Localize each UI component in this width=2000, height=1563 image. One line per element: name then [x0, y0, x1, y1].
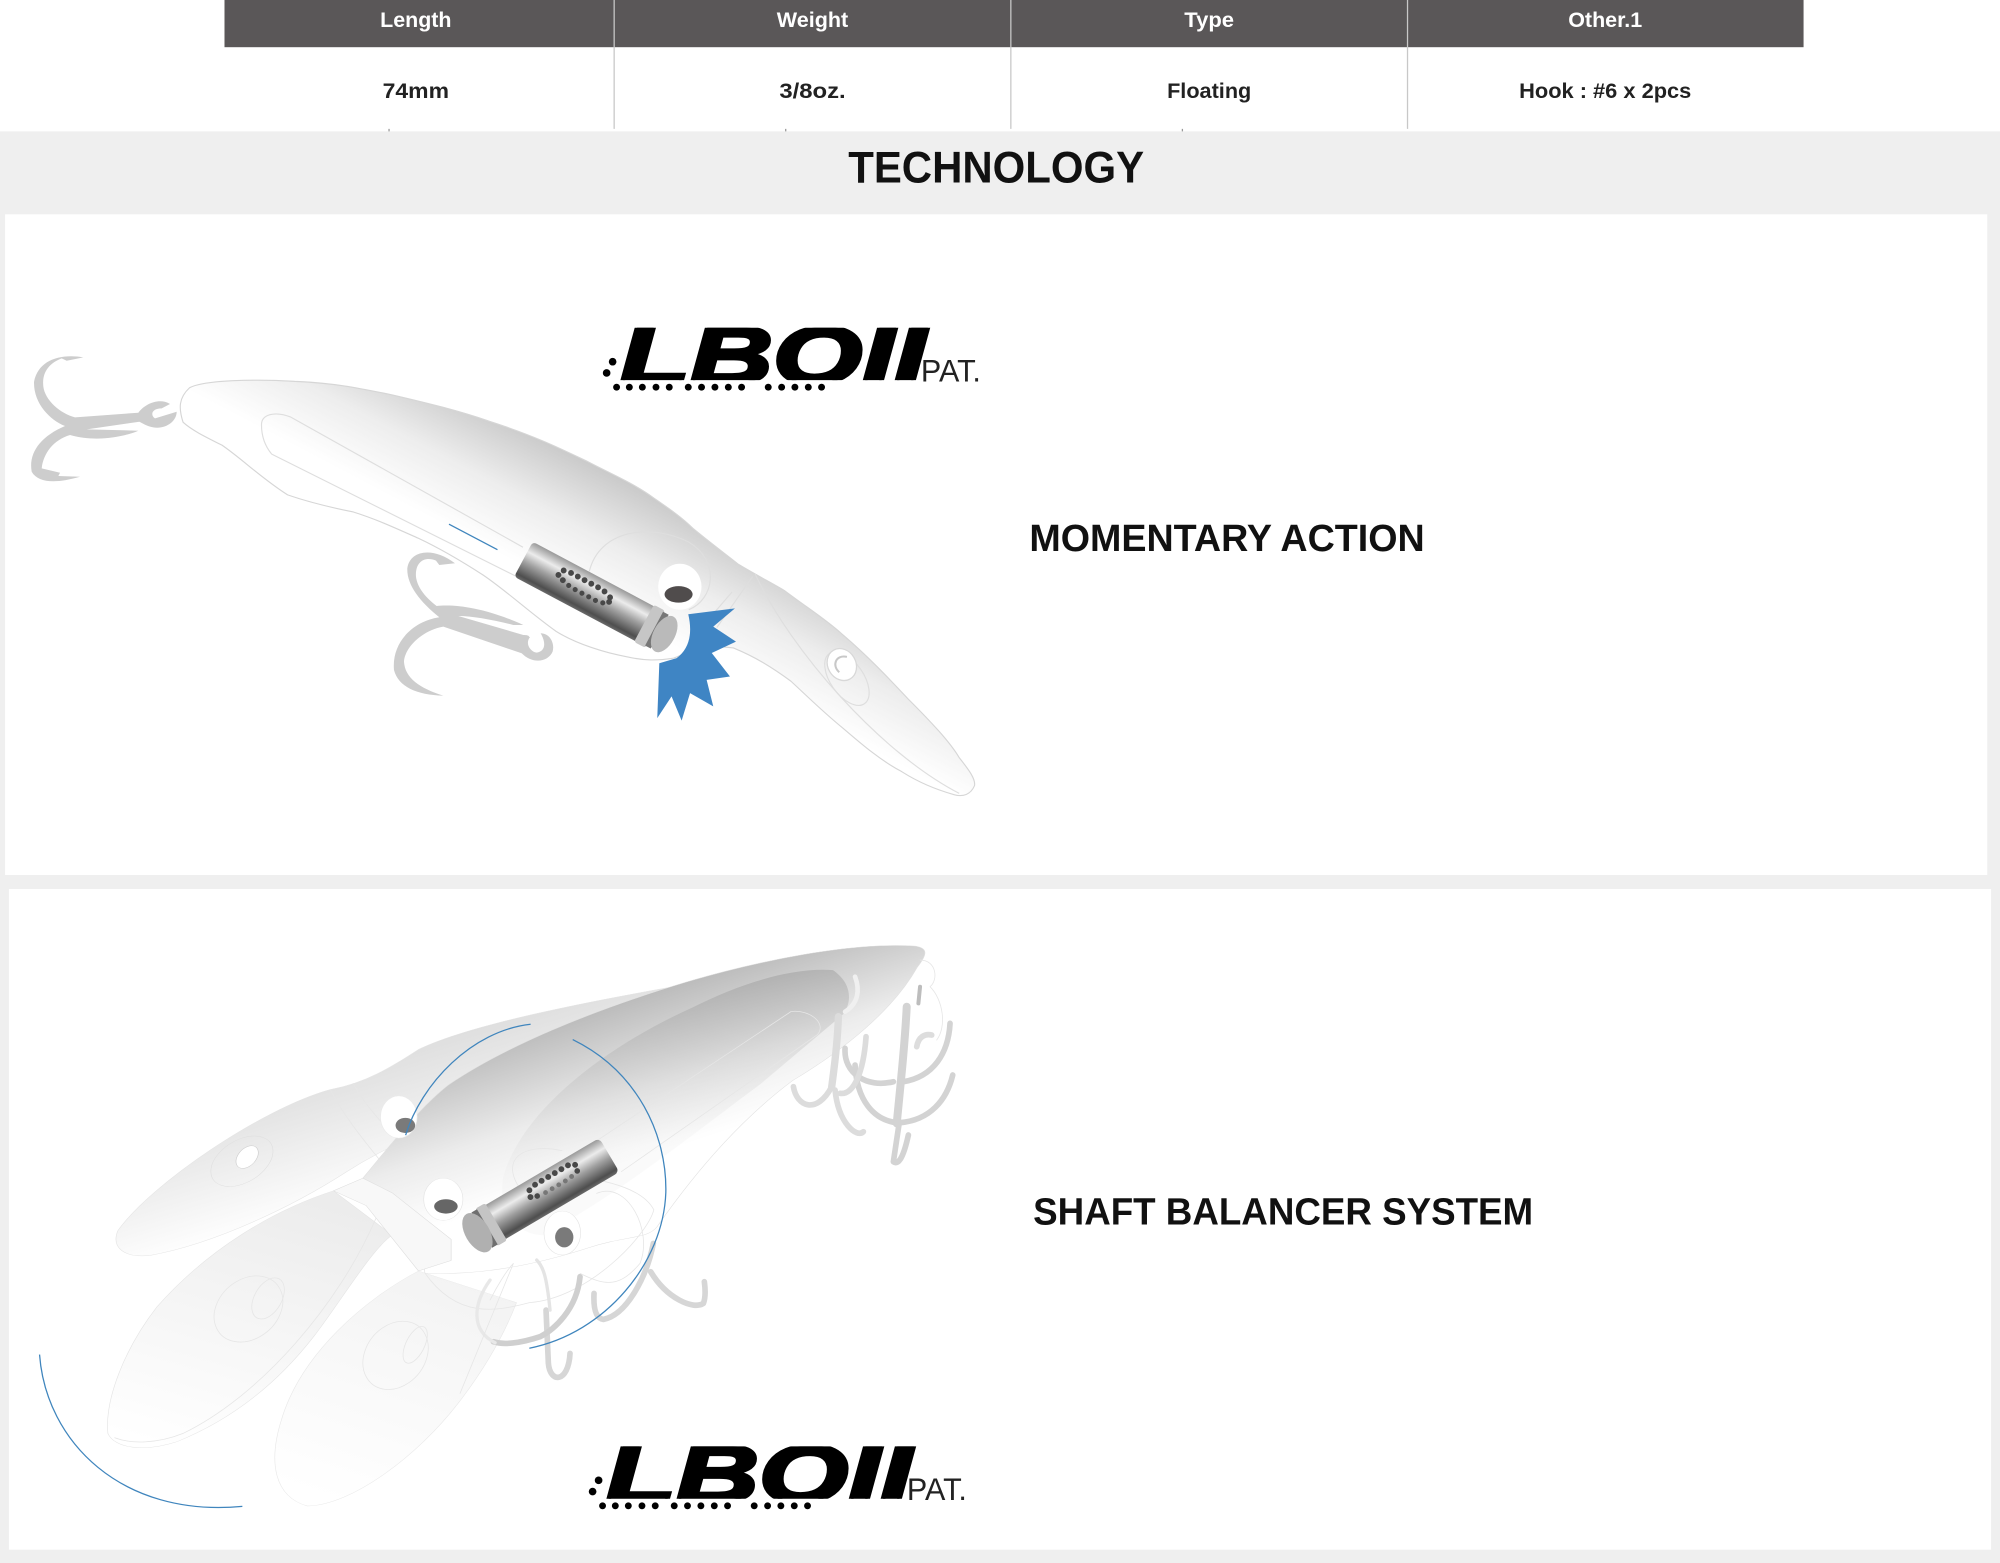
bottom ghost hooks: [460, 1191, 705, 1393]
spec table: Weight: [777, 7, 848, 32]
ghost lip A collar: [330, 1083, 405, 1168]
heading: TECHNOLOGY: [848, 143, 1144, 192]
spec table: Type: [1184, 7, 1234, 32]
spec table: Hook : #6 x 2pcs: [1519, 78, 1691, 103]
icon: tail treble hook: [31, 356, 177, 481]
logo dots: [603, 358, 825, 391]
lure swing illustration: [108, 946, 925, 1506]
spec table: 74mm: [383, 78, 449, 103]
panel: momentary action: [5, 214, 1987, 875]
logo: LB0II pat: [588, 1446, 964, 1510]
arrow: lower swing arc: [40, 1355, 242, 1508]
arrow: middle swing arc: [529, 1040, 666, 1348]
ghost lure A: [116, 980, 713, 1256]
inner swing lure: [502, 970, 849, 1235]
lip eye: [816, 643, 878, 713]
panel: shaft balancer system: [9, 889, 1991, 1550]
spec table: [0, 0, 2000, 131]
logo wordmark: LBOII: [620, 310, 929, 401]
spec table: 3/8oz.: [779, 78, 846, 103]
central head collar: [333, 1178, 451, 1271]
logo wordmark: LBOII: [606, 1429, 915, 1520]
shaft channel: [261, 414, 523, 577]
logo: LB0II pat: [602, 328, 978, 391]
icon: impact burst: [657, 608, 736, 721]
second eye: [544, 1211, 581, 1255]
lip detail: [709, 574, 959, 793]
logo: LB0II pat: PAT.: [921, 352, 981, 388]
icon: shaft balancer cylinder: [456, 1136, 620, 1258]
ghost eye A: [381, 1096, 417, 1138]
label: momentary action: MOMENTARY ACTION: [1029, 517, 1425, 560]
logo dots: [589, 1477, 811, 1509]
head contour: [589, 532, 710, 610]
spec table: Other.1: [1568, 7, 1642, 32]
ghost lip A eye: [198, 1129, 286, 1193]
label: shaft balancer system: SHAFT BALANCER SYSTEM: [1033, 1190, 1533, 1233]
central lure body: [363, 946, 925, 1273]
eye: [658, 564, 702, 610]
ghost lip C: [275, 1271, 517, 1506]
motion line: [449, 524, 497, 550]
lure body: [180, 380, 975, 796]
icon: belly treble hook: [394, 552, 553, 696]
bearing dots: [552, 564, 617, 610]
right ghost hooks: [793, 960, 953, 1163]
logo: LB0II pat: PAT.: [907, 1471, 967, 1507]
spec table: Floating: [1167, 78, 1251, 103]
arrow: upper swing arc: [406, 1024, 531, 1135]
main eye: [424, 1178, 463, 1220]
ghost lip B: [108, 1191, 392, 1448]
bearing dots: [522, 1158, 583, 1204]
spec table: Length: [380, 7, 452, 32]
icon: shaft balancer cylinder: [514, 541, 684, 658]
shaft channel: [575, 1011, 820, 1172]
secondary head outline: [425, 1149, 654, 1309]
